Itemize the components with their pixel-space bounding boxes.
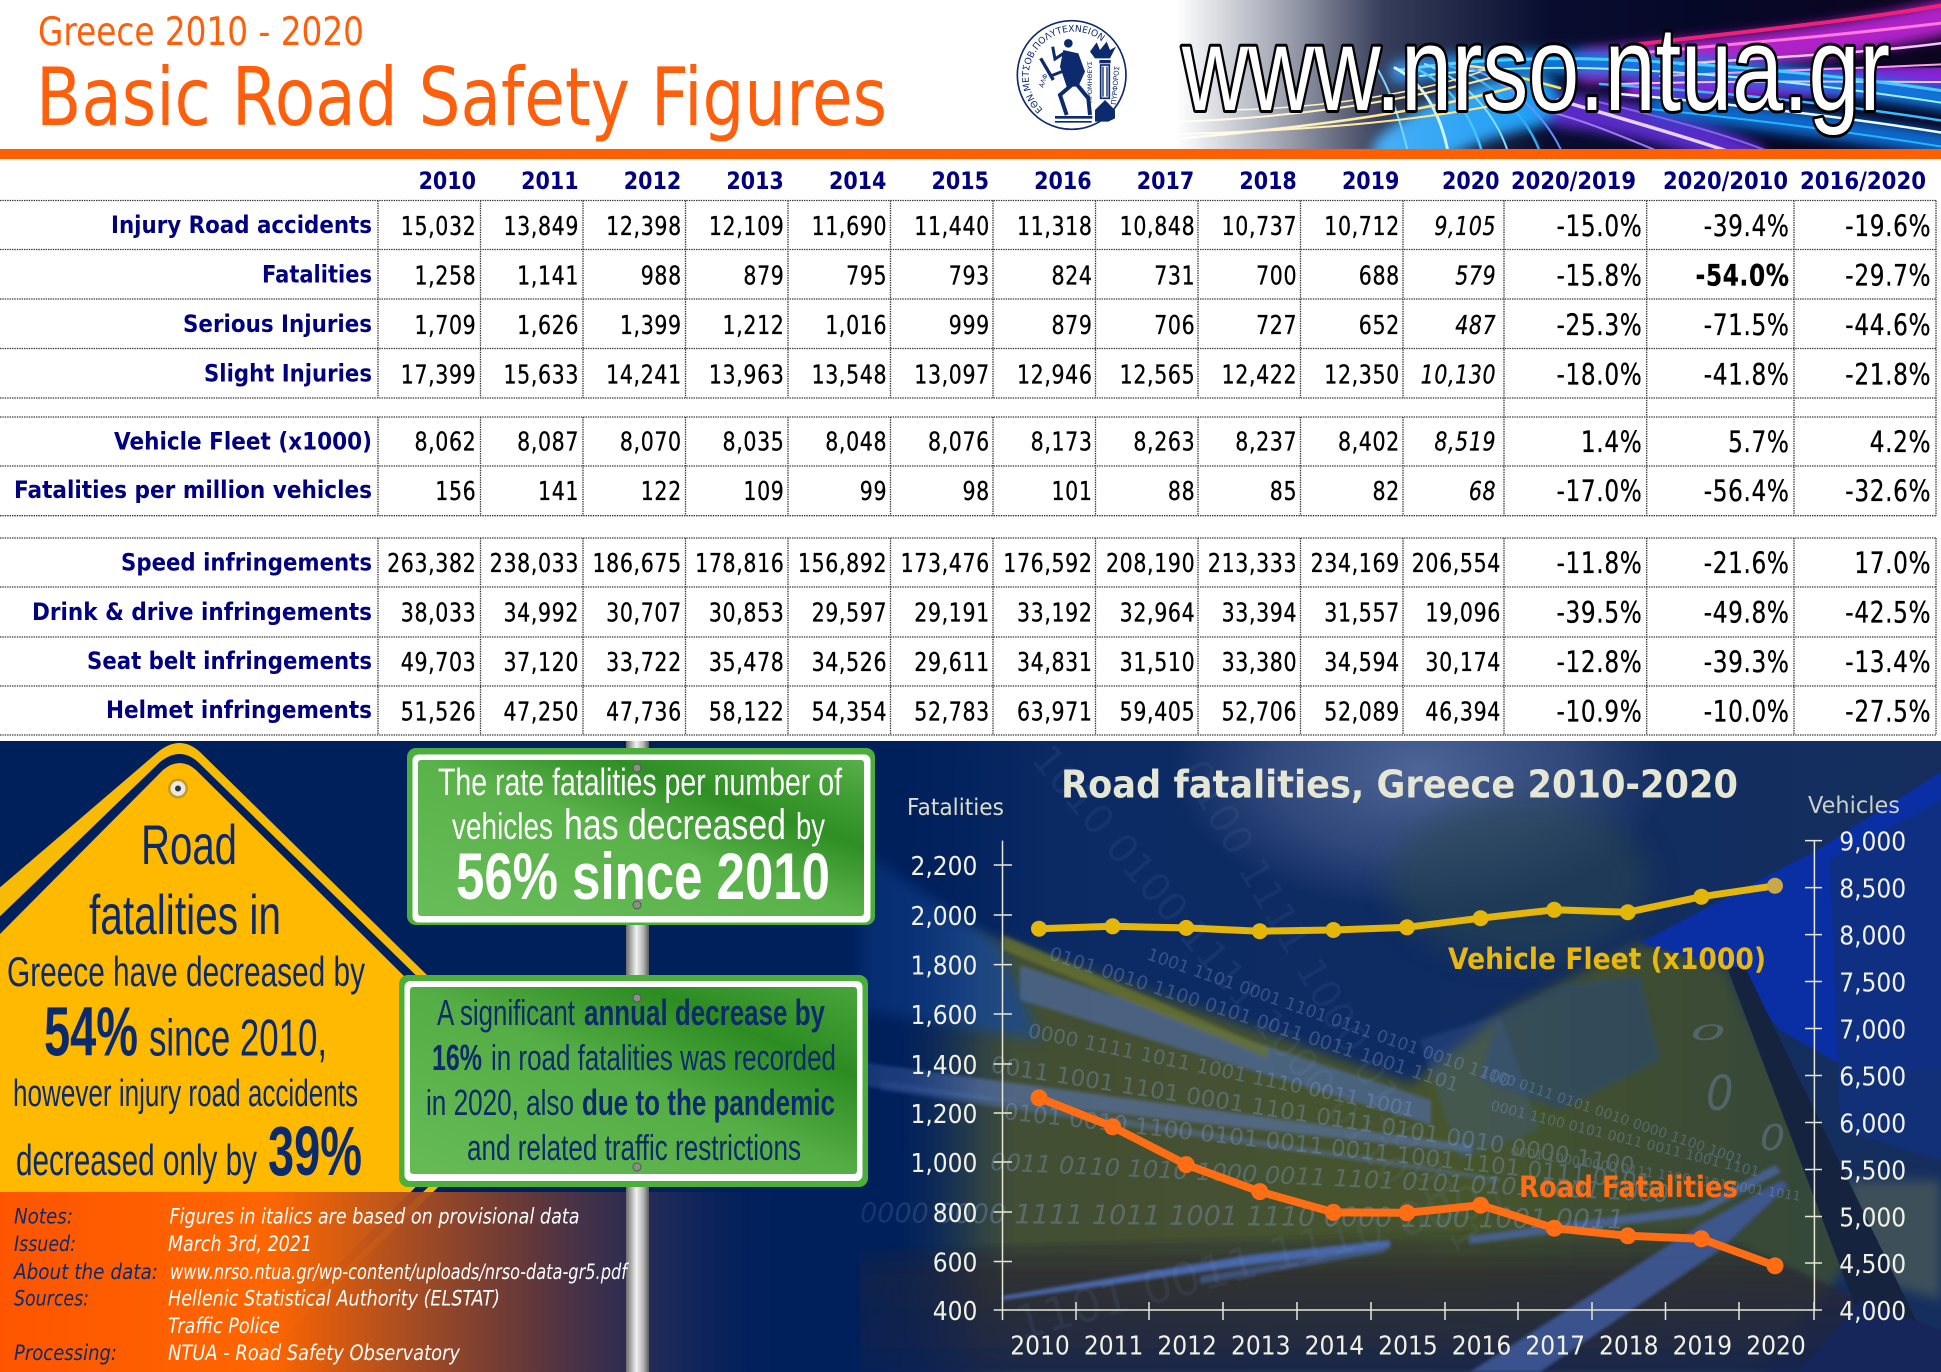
panel: green sign top [407, 748, 875, 925]
row: Slight Injuries: 13,097 [914, 359, 990, 390]
text: yellow sign message: Road [141, 813, 237, 876]
faint binary digits background: 0000 1111 1011 1001 1110 0011 1001 [1026, 1018, 1417, 1122]
row: Slight Injuries: -41.8% [1704, 359, 1790, 392]
row: Helmet infringements: 58,122 [709, 696, 784, 727]
row: Seat belt infringements: 34,526 [812, 647, 887, 678]
row: Fatalities: 879 [743, 260, 784, 291]
text: rate of fatalities: has decreased [564, 801, 786, 849]
row: Fatalities per million vehicles: -32.6% [1845, 476, 1931, 509]
row: Drink and drive infringements: Drink & drive infringements [32, 598, 372, 626]
row: Vehicle Fleet: 8,035 [723, 426, 784, 457]
row: Drink and drive infringements: 33,192 [1017, 597, 1093, 628]
x axis year labels: 2012 [1157, 1330, 1217, 1361]
table header years: 2020/2010 [1663, 167, 1788, 195]
text: yellow sign message: however injury road accidents [13, 1073, 358, 1115]
row: Fatalities per million vehicles: 122 [641, 476, 682, 507]
right axis labels: 4,000 [1839, 1296, 1906, 1326]
panel: yellow warning sign [0, 743, 438, 1249]
row: Vehicle Fleet: 8,062 [414, 426, 476, 457]
row: Injury Road accidents: 15,032 [401, 211, 476, 242]
row: Serious Injuries: 706 [1154, 310, 1195, 341]
row: Serious Injuries: 1,626 [517, 310, 579, 341]
row: Fatalities per million vehicles: 98 [962, 476, 990, 507]
table header years: 2020/2019 [1511, 167, 1636, 195]
x axis year labels: 2010 [1010, 1330, 1070, 1361]
row: Slight Injuries: 10,130 [1421, 359, 1496, 390]
row: Injury Road accidents [111, 211, 1931, 244]
row: Vehicle Fleet: 8,070 [620, 426, 682, 457]
row: Fatalities: 1,258 [414, 260, 476, 291]
icon: NTUA university seal: ΕΘΝ.ΜΕΤΣΟΒ.ΠΟΛΥΤΕΧΝΕΙΟΝ [1022, 24, 1105, 114]
row: Speed infringements: Speed infringements [121, 549, 372, 577]
left axis labels: 1,000 [910, 1148, 977, 1178]
row: Fatalities per million vehicles [14, 476, 1931, 509]
table header years: 2017 [1137, 168, 1194, 195]
row: Speed infringements: 156,892 [798, 548, 887, 579]
text: notes: Hellenic Statistical Authority (ELSTAT) [168, 1286, 500, 1310]
faint binary digits background: 0000 0000 1111 1011 1001 1110 0000 1100 1001 0011 [860, 1198, 1625, 1236]
row: Vehicle Fleet: 8,087 [517, 426, 579, 457]
bottom panel background: 0100 1111 1000 0110 0111 [1171, 752, 1491, 1260]
bottom panel background [0, 741, 1941, 1372]
row: Drink and drive infringements: 31,557 [1324, 597, 1400, 628]
row: Vehicle Fleet: 4.2% [1870, 427, 1931, 460]
text: notes: Sources: [14, 1286, 89, 1310]
row: Seat belt infringements: -13.4% [1845, 647, 1931, 680]
row: Slight Injuries: 13,548 [812, 359, 887, 390]
row: Helmet infringements: 59,405 [1120, 696, 1195, 727]
text: notes: About the data: [12, 1260, 158, 1284]
row: Injury Road accidents: Injury Road accidents [111, 211, 372, 239]
row: Helmet infringements: -10.0% [1704, 696, 1790, 729]
row: Injury Road accidents: 13,849 [503, 211, 579, 242]
table header years: 2020 [1442, 168, 1499, 195]
row: Speed infringements: 186,675 [592, 548, 682, 579]
row: Helmet infringements: 54,354 [812, 696, 887, 727]
sign screws [633, 764, 641, 909]
text: yellow sign message: Greece have decreased by [7, 948, 365, 995]
table header years: 2016 [1034, 168, 1092, 195]
left axis labels: 800 [933, 1198, 977, 1228]
row: Fatalities: 731 [1154, 260, 1195, 291]
axes [994, 841, 1822, 1320]
x axis year labels: 2014 [1305, 1330, 1364, 1361]
text: yellow sign message: since 2010, [149, 1010, 327, 1068]
row: Helmet infringements: 63,971 [1017, 696, 1093, 727]
row: Injury Road accidents: 10,712 [1324, 211, 1400, 242]
row: Serious Injuries: 487 [1455, 310, 1496, 341]
row: Serious Injuries: 1,709 [414, 310, 476, 341]
row: Vehicle Fleet: 8,076 [928, 426, 990, 457]
row: Slight Injuries: 14,241 [606, 359, 682, 390]
row: Helmet infringements: -10.9% [1557, 696, 1642, 729]
row: Speed infringements: 178,816 [695, 548, 784, 579]
row: Speed infringements: 206,554 [1412, 548, 1501, 579]
sign screws [633, 994, 641, 1171]
right axis labels: 5,500 [1839, 1155, 1906, 1186]
bottom panel background: 0 [1760, 1117, 1785, 1159]
text: notes [12, 1204, 630, 1365]
row: Serious Injuries: 1,016 [825, 310, 887, 341]
row: Fatalities: 988 [641, 260, 682, 291]
left axis labels: 400 [933, 1296, 977, 1326]
row: Injury Road accidents: -19.6% [1845, 211, 1931, 244]
right axis labels: 5,000 [1839, 1202, 1906, 1233]
left axis labels: 2,200 [910, 851, 977, 881]
row: Fatalities: 688 [1359, 260, 1400, 291]
row: Fatalities per million vehicles: -56.4% [1704, 476, 1790, 509]
row: Injury Road accidents: 12,398 [606, 211, 682, 242]
chart: road fatalities and vehicle fleet [907, 762, 1906, 1361]
chart title: Road fatalities, Greece 2010-2020 [1061, 762, 1738, 806]
row: Slight Injuries: -21.8% [1845, 359, 1931, 392]
text: notes: Issued: [14, 1232, 76, 1256]
row: Fatalities per million vehicles: Fatalities per million vehicles [14, 476, 372, 504]
row: Seat belt infringements: 35,478 [709, 647, 784, 678]
row: Drink and drive infringements: 30,853 [709, 597, 784, 628]
series label: vehicle fleet: Vehicle Fleet (x1000) [1448, 942, 1766, 976]
pale lower-left sign stripe under notes [0, 1340, 90, 1372]
left axis labels: 2,000 [910, 901, 977, 931]
row: Seat belt infringements: -12.8% [1557, 647, 1642, 680]
row: Helmet infringements [106, 696, 1931, 729]
row: Vehicle Fleet: 8,402 [1338, 426, 1400, 457]
row: Vehicle Fleet: 8,263 [1133, 426, 1195, 457]
faint binary digits background: 0101 0010 1100 0101 0011 0011 1001 1101 [1046, 943, 1461, 1096]
text: rate of fatalities: vehicles [452, 806, 553, 847]
x axis year labels: 2011 [1084, 1330, 1143, 1361]
panel: notes background [0, 1192, 790, 1372]
row: Drink and drive infringements: 19,096 [1425, 597, 1501, 628]
table header years: 2011 [521, 168, 579, 195]
row: Slight Injuries: 17,399 [401, 359, 476, 390]
row: Slight Injuries: 13,963 [709, 359, 784, 390]
row: Fatalities: 579 [1455, 260, 1496, 291]
row: Fatalities per million vehicles: -17.0% [1557, 476, 1642, 509]
row: Seat belt infringements [87, 647, 1931, 680]
row: Seat belt infringements: 33,722 [606, 647, 682, 678]
row: Seat belt infringements: 31,510 [1120, 647, 1195, 678]
row: Seat belt infringements: 34,831 [1017, 647, 1093, 678]
left axis labels: 1,400 [910, 1050, 977, 1080]
table header years: 2015 [932, 168, 989, 195]
faint binary digits background: 0011 1001 1101 0001 1101 0111 0101 0010 0000 1100 [989, 1052, 1636, 1180]
row: Helmet infringements: -27.5% [1845, 696, 1931, 729]
row: Fatalities: Fatalities [262, 260, 372, 288]
row: Fatalities: 824 [1052, 260, 1093, 291]
table header years: 2018 [1239, 168, 1297, 195]
row: Seat belt infringements: 37,120 [503, 647, 579, 678]
row: Helmet infringements: 47,736 [606, 696, 682, 727]
bottom panel background: 0 [1706, 1066, 1733, 1122]
row: Fatalities per million vehicles: 141 [538, 476, 579, 507]
row: Slight Injuries: 12,350 [1324, 359, 1400, 390]
row: Drink and drive infringements: 34,992 [503, 597, 579, 628]
row: Injury Road accidents: 10,737 [1222, 211, 1297, 242]
row: Drink and drive infringements [32, 597, 1931, 630]
subtitle: Greece 2010 - 2020 [38, 10, 364, 55]
text: notes: Figures in italics are based on provisional data [170, 1204, 580, 1228]
text: notes: March 3rd, 2021 [168, 1232, 312, 1256]
row: Speed infringements: 234,169 [1311, 548, 1400, 579]
table header years: 2013 [726, 168, 784, 195]
row: Vehicle Fleet: 8,173 [1031, 426, 1093, 457]
text: annual decrease [426, 992, 836, 1168]
row: Vehicle Fleet: 8,048 [825, 426, 887, 457]
row: Speed infringements: 213,333 [1208, 548, 1297, 579]
row: Serious Injuries: 1,399 [620, 310, 682, 341]
row: Helmet infringements: 52,706 [1222, 696, 1297, 727]
table header years: 2012 [624, 168, 681, 195]
row: Slight Injuries: 12,946 [1017, 359, 1093, 390]
row: Seat belt infringements: 30,174 [1425, 647, 1501, 678]
faint binary digits background: 1100 0111 0101 0010 0000 1100 1001 [1479, 1064, 1745, 1169]
text: annual decrease: and related traffic restrictions [467, 1127, 801, 1168]
row: Injury Road accidents: 11,318 [1017, 211, 1093, 242]
table header years: 2016/2020 [1800, 167, 1926, 195]
bottom panel background: 1010 0100 1111 1000 0110 [1022, 737, 1417, 1195]
right axis labels: 7,000 [1839, 1014, 1906, 1045]
row: Fatalities: 1,141 [517, 260, 579, 291]
left axis labels: 1,800 [910, 950, 977, 981]
text: annual decrease: A significant [437, 992, 575, 1033]
row: Seat belt infringements: 49,703 [401, 647, 476, 678]
row: Slight Injuries [204, 359, 1931, 392]
row: Vehicle Fleet: 8,237 [1235, 426, 1297, 457]
series label: road fatalities: Road Fatalities [1519, 1170, 1738, 1204]
row: Helmet infringements: Helmet infringements [106, 696, 372, 724]
row: Speed infringements: 176,592 [1003, 548, 1093, 579]
row: Vehicle Fleet: 8,519 [1434, 426, 1496, 457]
row: Serious Injuries: 879 [1052, 310, 1093, 341]
icon: NTUA university seal: ΑΛΦ [1037, 73, 1050, 89]
row: Helmet infringements: 47,250 [503, 696, 579, 727]
left axis title: Fatalities [907, 795, 1004, 821]
x axis year labels: 2019 [1673, 1330, 1732, 1361]
text: yellow sign message [7, 813, 365, 1190]
icon: NTUA university seal: ΠΡΟΜΗΘΕΥΣ [1086, 61, 1094, 103]
road light streaks [860, 935, 1788, 1372]
row: Injury Road accidents: 11,690 [812, 211, 887, 242]
row: Speed infringements: 173,476 [901, 548, 990, 579]
row: Drink and drive infringements: -39.5% [1557, 597, 1642, 630]
row: Speed infringements: -11.8% [1557, 548, 1642, 581]
row: Slight Injuries: 15,633 [503, 359, 579, 390]
text: yellow sign message: decreased only by [16, 1136, 257, 1185]
title: Basic Road Safety Figures [36, 51, 887, 144]
x axis year labels: 2017 [1525, 1330, 1585, 1361]
faint binary digits background: 1001 1101 0001 1101 0111 0101 0010 1100 [1144, 945, 1513, 1092]
row: Fatalities: -29.7% [1845, 260, 1931, 293]
row: Fatalities: -54.0% [1696, 260, 1790, 293]
row: Slight Injuries: 12,565 [1120, 359, 1195, 390]
row: Drink and drive infringements: 33,394 [1222, 597, 1297, 628]
row: Fatalities: 795 [846, 260, 887, 291]
row: Speed infringements: 263,382 [387, 548, 476, 579]
x axis year labels: 2018 [1599, 1330, 1659, 1361]
text: notes: Traffic Police [168, 1314, 280, 1338]
line: road fatalities [1030, 1089, 1784, 1274]
faint binary digits background [860, 943, 1802, 1236]
text: rate of fatalities: by [796, 806, 825, 847]
text: annual decrease: annual decrease by [584, 992, 825, 1033]
text: rate of fatalities: The rate fatalities per number of [438, 762, 842, 804]
row: Serious Injuries: -44.6% [1845, 310, 1931, 343]
row: Injury Road accidents: -15.0% [1557, 211, 1642, 244]
faint binary digits background: 0001 1100 0101 0011 0011 1001 1101 [1489, 1098, 1761, 1181]
text: annual decrease: due to the pandemic [582, 1082, 835, 1123]
row: Helmet infringements: 52,783 [914, 696, 990, 727]
table header years: 2014 [829, 168, 886, 195]
right axis labels: 6,500 [1839, 1061, 1906, 1092]
left axis labels [910, 851, 977, 1326]
row: Drink and drive infringements: 38,033 [401, 597, 476, 628]
row: Speed infringements: 208,190 [1106, 548, 1195, 579]
icon: NTUA university seal: ΠΥΡΦΟΡΟΣ [1110, 66, 1121, 105]
row: Fatalities: 793 [949, 260, 990, 291]
icon: sign bolt [168, 778, 188, 798]
row: Serious Injuries: -71.5% [1704, 310, 1790, 343]
row: Helmet infringements: 51,526 [401, 696, 476, 727]
row: Fatalities [262, 260, 1931, 293]
row: Vehicle Fleet: Vehicle Fleet (x1000) [114, 427, 372, 455]
row: Serious Injuries: 999 [949, 310, 990, 341]
text: rate of fatalities: 56% since 2010 [456, 839, 830, 913]
icon: NTUA university seal [1016, 20, 1127, 130]
icon: sign pole [626, 741, 649, 1372]
bottom panel background: 0 [1690, 1021, 1726, 1045]
text: notes: Notes: [14, 1204, 73, 1228]
table header years: 2010 [419, 168, 476, 195]
table header years: 2019 [1342, 168, 1399, 195]
row: Fatalities per million vehicles: 85 [1270, 476, 1297, 507]
table header years [419, 167, 1926, 195]
text: notes: Processing: [14, 1341, 117, 1365]
text: yellow sign message: fatalities in [89, 883, 281, 946]
x axis year labels: 2015 [1378, 1330, 1438, 1361]
row: Speed infringements [121, 548, 1931, 581]
line: vehicle fleet [1031, 878, 1783, 939]
row: Serious Injuries [183, 310, 1931, 343]
row: Fatalities per million vehicles: 101 [1052, 476, 1093, 507]
left axis labels: 1,600 [910, 1000, 977, 1030]
row: Drink and drive infringements: -49.8% [1704, 597, 1790, 630]
orange header rule [0, 149, 1941, 159]
row: Helmet infringements: 52,089 [1324, 696, 1400, 727]
row: Injury Road accidents: 11,440 [914, 211, 990, 242]
faint binary digits background: 0011 0110 1010 1000 0011 1101 0101 0101 1001 1000 [990, 1148, 1670, 1208]
text: yellow sign message: 39% [268, 1112, 362, 1190]
row: Drink and drive infringements: 30,707 [606, 597, 682, 628]
bottom panel background: 1101 0011 1110 0001 [1009, 1166, 1518, 1351]
row: Fatalities per million vehicles: 99 [860, 476, 887, 507]
row: Injury Road accidents: -39.4% [1704, 211, 1790, 244]
row: Slight Injuries: -18.0% [1557, 359, 1642, 392]
right axis labels: 8,500 [1839, 873, 1906, 904]
row: Seat belt infringements: 34,594 [1324, 647, 1400, 678]
faint binary digits background: 0001 1000 0000 0111 1100 1101 0001 1011 [1509, 1144, 1802, 1205]
row: Injury Road accidents: 12,109 [709, 211, 784, 242]
text: annual decrease: in 2020, also [426, 1082, 574, 1123]
row: Vehicle Fleet: 5.7% [1728, 427, 1790, 460]
row: Speed infringements: -21.6% [1704, 548, 1790, 581]
right axis labels: 9,000 [1839, 826, 1906, 857]
row: Fatalities per million vehicles: 109 [743, 476, 784, 507]
right axis labels: 7,500 [1839, 967, 1906, 998]
row: Drink and drive infringements: 29,191 [914, 597, 990, 628]
right axis labels: 6,000 [1839, 1108, 1906, 1139]
row: Drink and drive infringements: 32,964 [1120, 597, 1195, 628]
row: Serious Injuries: 652 [1359, 310, 1400, 341]
row: Seat belt infringements: 33,380 [1222, 647, 1297, 678]
right axis labels: 4,500 [1839, 1249, 1906, 1279]
row: Injury Road accidents: 9,105 [1434, 211, 1496, 242]
row: Drink and drive infringements: -42.5% [1845, 597, 1931, 630]
x axis year labels: 2016 [1452, 1330, 1511, 1361]
row: Seat belt infringements: -39.3% [1704, 647, 1790, 680]
x axis year labels [1010, 1330, 1806, 1361]
row: Serious Injuries: 727 [1256, 310, 1297, 341]
row: Serious Injuries: -25.3% [1557, 310, 1642, 343]
row: Fatalities per million vehicles: 88 [1168, 476, 1195, 507]
text: notes: NTUA - Road Safety Observatory [168, 1341, 460, 1365]
row: Vehicle Fleet: 1.4% [1581, 427, 1642, 460]
text: rate of fatalities [438, 762, 842, 913]
banner: light streaks [1186, 0, 1941, 149]
text: annual decrease: 16% [432, 1037, 482, 1078]
row: Injury Road accidents: 10,848 [1120, 211, 1195, 242]
row: Speed infringements: 238,033 [490, 548, 579, 579]
right axis labels [1839, 826, 1906, 1326]
text: annual decrease: in road fatalities was recorded [491, 1037, 836, 1078]
text: notes: www.nrso.ntua.gr/wp-content/uploads/nrso-data-gr5.pdf [170, 1260, 630, 1284]
row: Helmet infringements: 46,394 [1425, 696, 1501, 727]
row: Seat belt infringements: Seat belt infringements [87, 647, 372, 675]
faint binary digits background: 0101 0010 1100 0101 0011 0011 1001 1101 0111 0101 [1002, 1099, 1652, 1196]
row: Fatalities: 700 [1256, 260, 1297, 291]
row: Vehicle Fleet [114, 426, 1931, 460]
row: Serious Injuries: Serious Injuries [183, 310, 372, 338]
row: Fatalities: -15.8% [1557, 260, 1642, 293]
row: Speed infringements: 17.0% [1854, 548, 1931, 581]
row: Serious Injuries: 1,212 [723, 310, 784, 341]
row: Slight Injuries: 12,422 [1222, 359, 1297, 390]
row: Slight Injuries: Slight Injuries [204, 360, 372, 388]
text: yellow sign message: 54% [44, 992, 138, 1070]
panel: green sign lower [399, 975, 868, 1187]
row: Drink and drive infringements: 29,597 [812, 597, 887, 628]
row: Fatalities per million vehicles: 156 [435, 476, 476, 507]
x axis year labels: 2020 [1746, 1330, 1806, 1361]
right axis title: Vehicles [1808, 793, 1900, 819]
left axis labels: 1,200 [910, 1099, 977, 1129]
table grid lines [0, 200, 1936, 735]
x axis year labels: 2013 [1231, 1330, 1291, 1361]
row: Fatalities per million vehicles: 82 [1372, 476, 1400, 507]
right axis labels: 8,000 [1839, 920, 1906, 951]
row: Fatalities per million vehicles: 68 [1469, 476, 1496, 507]
left axis labels: 600 [933, 1247, 977, 1278]
row: Seat belt infringements: 29,611 [914, 647, 990, 678]
